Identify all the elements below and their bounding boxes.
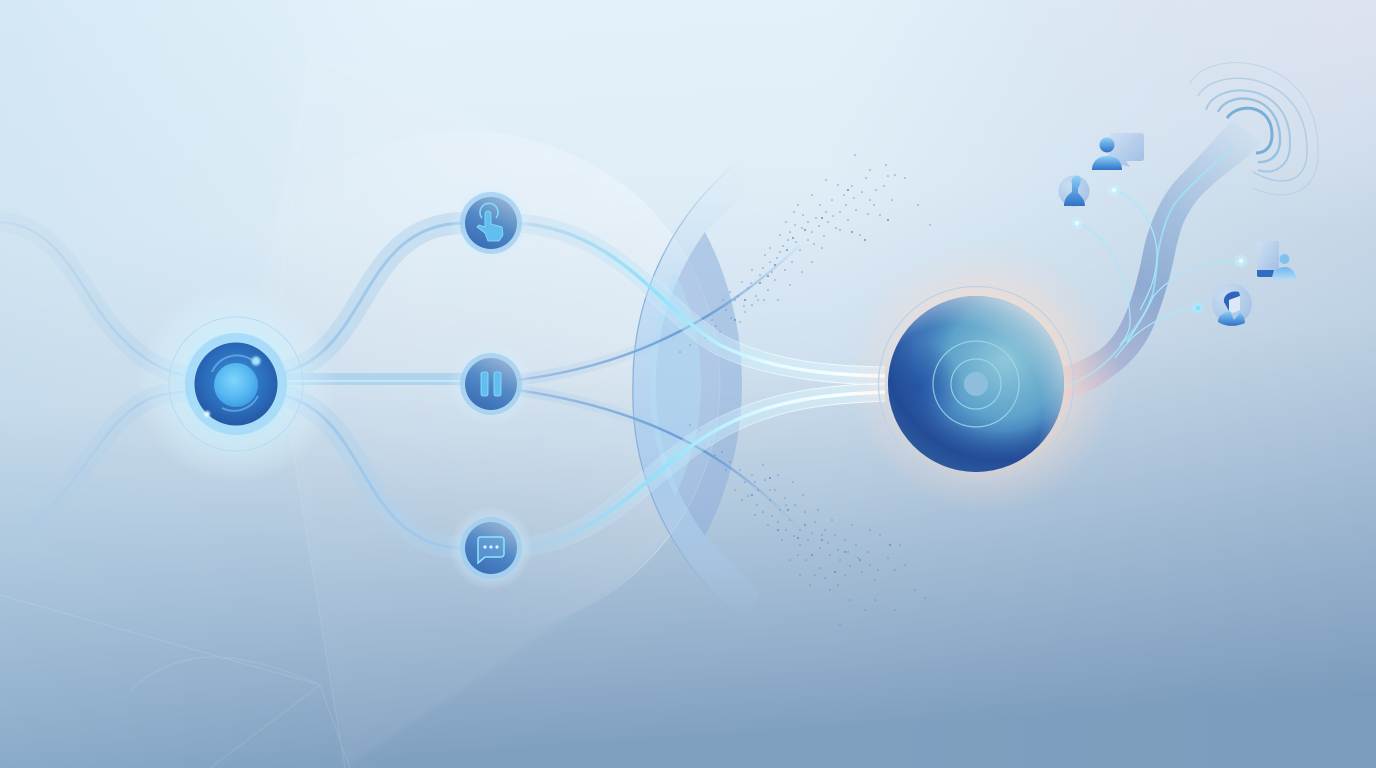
particle clouds bbox=[680, 155, 930, 625]
central sphere bbox=[870, 268, 1107, 500]
icon: pause bars bbox=[481, 372, 501, 396]
inner pointed lens bbox=[656, 232, 742, 536]
signal ripples bbox=[1190, 63, 1318, 195]
icon: phone with user bbox=[1257, 241, 1296, 280]
lower flow bbox=[517, 383, 885, 557]
branch lines to users bbox=[1077, 190, 1241, 358]
node: touch bbox=[449, 181, 533, 265]
tracks from hub to nodes bbox=[285, 223, 465, 548]
background facets bbox=[0, 50, 720, 768]
icon: user with monitor bbox=[1092, 133, 1144, 170]
bright flows into sphere bbox=[517, 214, 885, 557]
left incoming tracks bbox=[0, 222, 190, 540]
outer lens edge bbox=[633, 160, 745, 620]
icon: user in disc right bbox=[1212, 284, 1252, 326]
node: chat bbox=[449, 506, 533, 590]
sphere bottom shadow bbox=[888, 326, 1058, 472]
ribbon bright line bbox=[1063, 147, 1233, 387]
icon: hand pointer bbox=[477, 203, 503, 241]
branch endpoint dots bbox=[1071, 184, 1247, 314]
right ribbon bbox=[1063, 120, 1262, 400]
icon: user in disc left bbox=[1058, 175, 1090, 206]
outer crescent lens bbox=[633, 160, 760, 620]
icon: speech bubble bbox=[478, 537, 504, 563]
node outgoing branches bbox=[517, 245, 800, 530]
lens shapes bbox=[633, 160, 760, 620]
sphere teal centre bbox=[922, 296, 1064, 442]
left hub bbox=[136, 284, 336, 484]
sphere pale rim bbox=[899, 296, 1064, 446]
node: pause bbox=[449, 342, 533, 426]
sphere left shadow bbox=[888, 350, 958, 411]
upper flow bbox=[517, 214, 885, 385]
bright lens overlap bbox=[650, 272, 701, 496]
